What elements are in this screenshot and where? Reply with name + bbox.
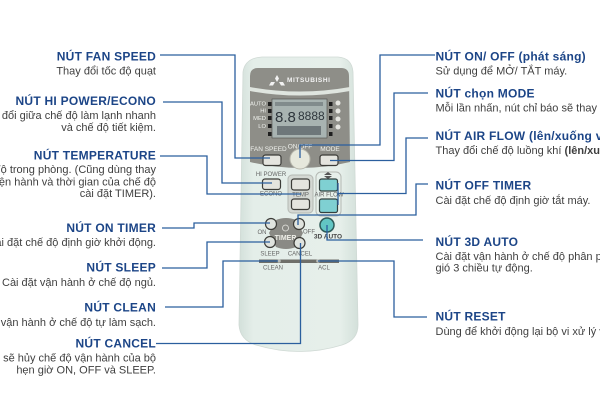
connector <box>338 138 428 205</box>
clean and ACL slot: ACL <box>318 266 330 272</box>
callout: clean <box>0 261 278 329</box>
clean and ACL slot: CLEAN <box>263 266 283 272</box>
label: econo: ECONO <box>260 192 282 198</box>
button: 3D auto <box>314 218 342 240</box>
connector <box>327 225 423 240</box>
temperature group: TEMP <box>292 192 309 198</box>
heading: NÚT FAN SPEED <box>57 48 156 64</box>
description: Cài đặt chế độ định giờ tắt máy. <box>436 194 590 207</box>
heading: NÚT ON/ OFF (phát sáng) <box>436 49 586 64</box>
callout: on/off <box>300 49 586 158</box>
connector <box>298 184 428 225</box>
fan speed indicators: AUTO <box>250 102 266 108</box>
connector <box>300 55 435 158</box>
connector <box>162 223 270 228</box>
callout: reset <box>318 261 600 338</box>
button: 3D auto: 3D AUTO <box>314 234 342 240</box>
timer group: TIMER <box>275 235 296 242</box>
clean and ACL slot <box>259 259 339 272</box>
heading: NÚT chọn MODE <box>436 86 535 101</box>
LCD screen: 8888 <box>298 109 325 123</box>
timer group <box>258 218 315 258</box>
fan speed indicators: LO <box>258 124 266 130</box>
LCD screen: 8.8 <box>275 109 296 126</box>
fan speed indicators: HI <box>260 108 266 114</box>
description: hẹn giờ ON, OFF và SLEEP. <box>16 364 156 376</box>
remote body <box>239 57 358 352</box>
heading: NÚT SLEEP <box>86 260 156 275</box>
heading: NÚT RESET <box>436 309 506 324</box>
description: Sử dụng để MỞ/ TẮT máy. <box>436 65 567 78</box>
connector <box>165 261 278 307</box>
label: hi power: HI POWER <box>256 172 287 178</box>
callout: hi power <box>2 93 272 183</box>
connector <box>156 243 300 344</box>
callout: sleep <box>2 242 270 289</box>
callout: air flow <box>338 128 600 205</box>
heading: NÚT OFF TIMER <box>436 177 531 192</box>
description: gió 3 chiều tự động. <box>436 263 533 275</box>
callout: fan speed <box>56 48 270 158</box>
button: mode <box>320 155 338 166</box>
connector <box>160 55 270 158</box>
button: fan speed <box>263 155 281 166</box>
heading: NÚT CLEAN <box>84 300 156 315</box>
button: on/off <box>290 149 310 169</box>
remote control <box>239 57 358 352</box>
description: Cài đặt vận hành ở chế độ ngủ. <box>2 277 156 289</box>
timer group: ON <box>258 230 266 236</box>
description: và chế độ tiết kiệm. <box>61 122 156 134</box>
temperature group <box>288 175 313 213</box>
label: MODE: MODE <box>320 146 340 153</box>
heading: NÚT CANCEL <box>76 335 156 350</box>
remote top grey panel <box>250 68 350 168</box>
white curve band <box>250 87 350 96</box>
LCD screen <box>272 99 327 138</box>
timer group: SLEEP <box>260 252 280 258</box>
heading: NÚT 3D AUTO <box>436 234 518 249</box>
callout: mode <box>330 86 600 160</box>
button: hi power <box>262 179 280 190</box>
logo <box>269 75 331 86</box>
label: ON/OFF: ON/OFF <box>288 144 312 150</box>
callout: off timer <box>298 177 590 225</box>
air flow group <box>314 172 344 216</box>
connector <box>163 102 272 183</box>
fan speed indicators: MED <box>253 116 266 122</box>
connector <box>318 261 427 317</box>
timer group: OFF <box>303 230 315 236</box>
heading: NÚT TEMPERATURE <box>34 148 156 162</box>
timer group: CANCEL <box>288 252 313 258</box>
connector <box>330 93 428 160</box>
connector <box>162 242 270 268</box>
icon: three diamonds <box>269 75 285 86</box>
callout: cancel <box>0 243 300 376</box>
callout: temperature <box>0 148 301 200</box>
label: FAN SPEED: FAN SPEED <box>250 146 287 153</box>
callout: on timer <box>0 220 270 249</box>
description: Thay đổi tốc độ quạt <box>56 66 156 78</box>
callout: 3D auto <box>327 225 600 275</box>
heading: NÚT ON TIMER <box>66 220 156 235</box>
description: đổi giữa chế độ làm lạnh nhanh <box>2 110 156 122</box>
air flow group: AIR FLOW <box>314 192 344 198</box>
description: cài đặt TIMER). <box>80 188 156 200</box>
fan speed indicators <box>250 100 340 136</box>
brand name: MITSUBISHI <box>287 77 331 84</box>
heading: NÚT HI POWER/ECONO <box>15 93 156 108</box>
connector <box>160 156 301 194</box>
